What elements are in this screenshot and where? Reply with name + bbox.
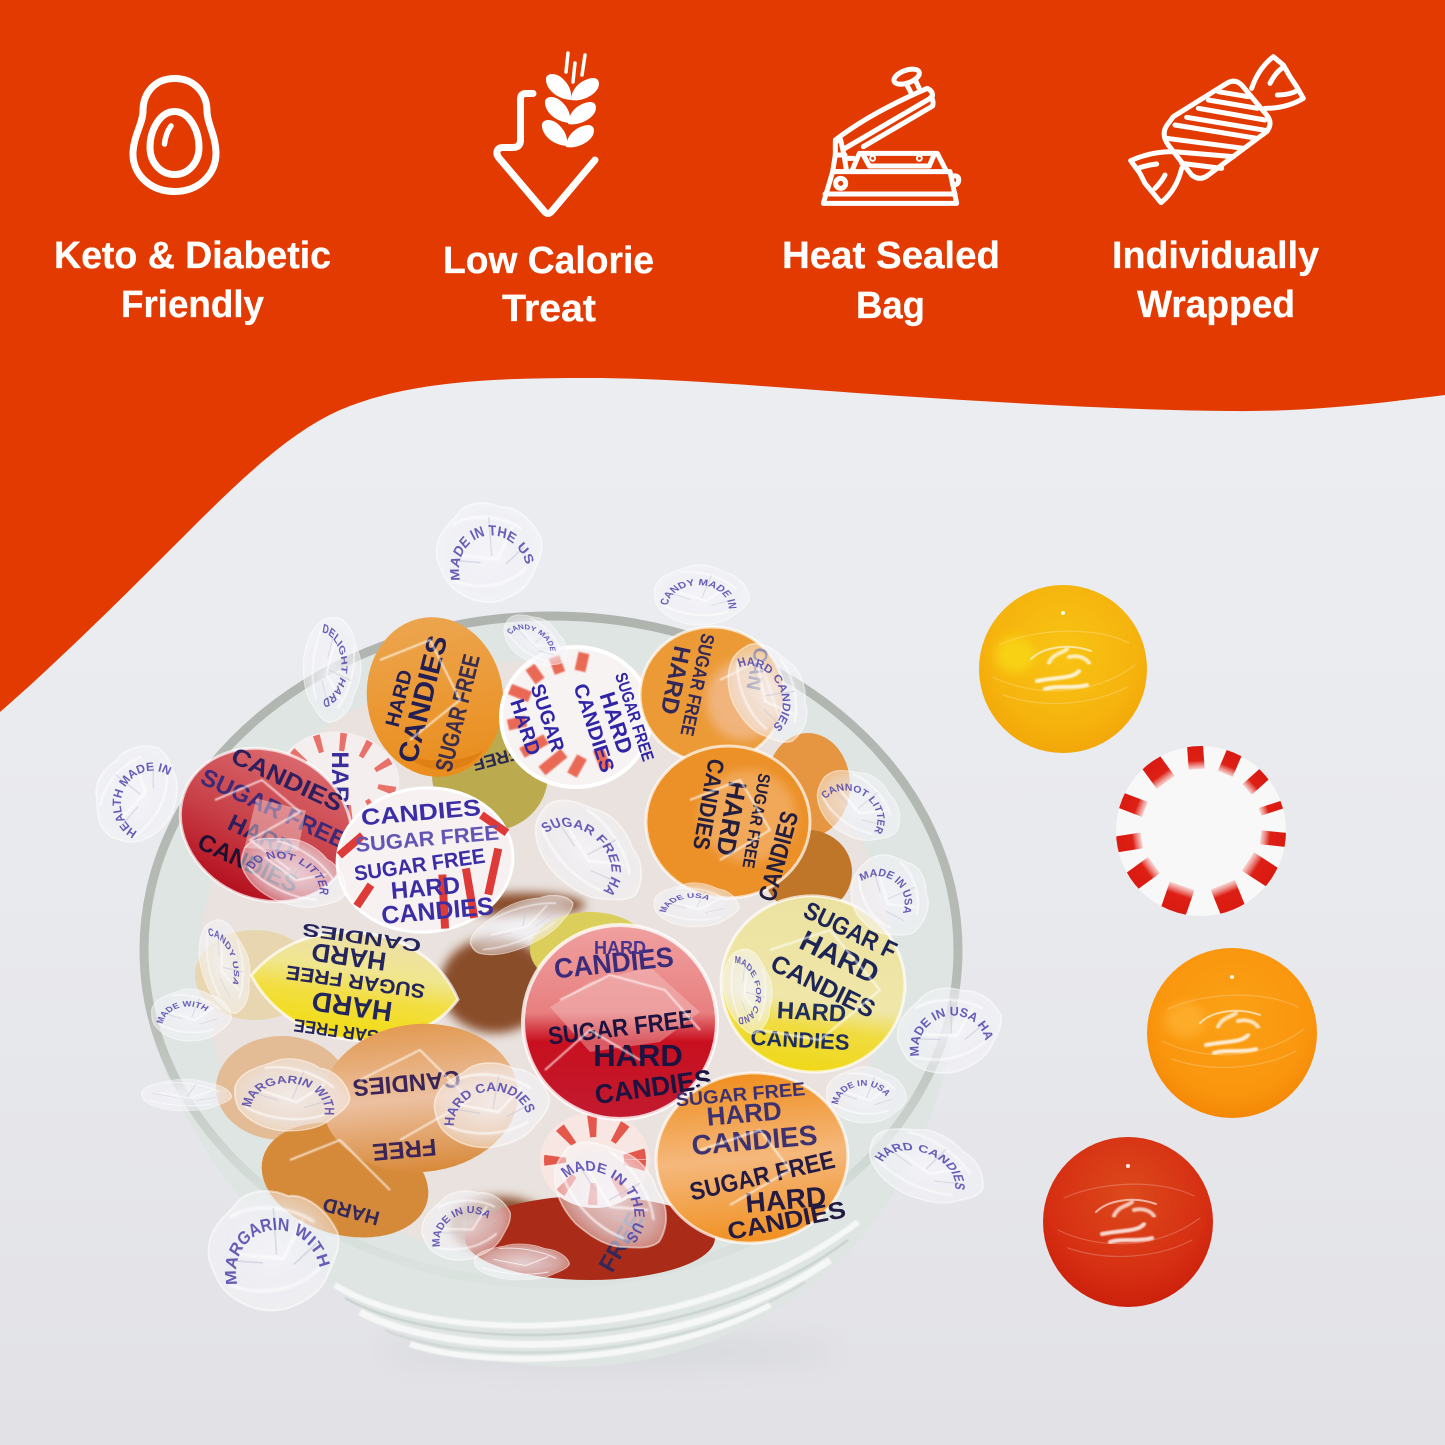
wrapper: bottom centre twist: MADE IN THE USA: [560, 1160, 645, 1242]
candy: orange top left: [357, 608, 513, 786]
candy: orange top right: CAN: [741, 645, 772, 692]
candy: peppermint top centre: SUGAR FREE: [611, 670, 658, 764]
candy: red large centre: HARD: [594, 938, 646, 958]
candy: orange bottom right: CANDIES: [725, 1196, 848, 1246]
wrapper: left edge strip: [142, 1079, 232, 1111]
candy: peppermint bottom centre: [540, 1112, 650, 1208]
candy: orange centre right: CANDIES: [753, 808, 804, 904]
candy: brown orange bottom left: HARD: [321, 1193, 382, 1229]
wrapper: orange right twist: [727, 643, 808, 743]
candy: peppermint left centre: SUGAR FREE: [353, 845, 487, 886]
candy: orange centre right: SUGAR FREE: [738, 772, 774, 870]
feature: individually wrapped: [1112, 57, 1319, 326]
wrapper: centre twist: [463, 881, 581, 967]
candy: orange bottom right: SUGAR FREE: [675, 1079, 806, 1111]
candy: yellow right: SUGAR F: [799, 896, 901, 965]
candy: brown orange centre bottom: CANDIES: [352, 1064, 462, 1101]
wrapper: right of centre candy: CANNOT LITTER: [822, 784, 885, 834]
wrapper: orange right twist: HARD CANDIES MADE USA: [737, 657, 790, 731]
candy: amber: [979, 585, 1147, 753]
wrapper: bottom strip: [474, 1244, 569, 1280]
wrapper: far left lower: MADE WITH: [156, 1000, 209, 1024]
candy: orange: [1147, 948, 1317, 1118]
candy: red: [1043, 1137, 1213, 1307]
film crinkles across candies: [215, 640, 880, 1205]
orange header band with wave: [0, 0, 1445, 712]
candy: orange centre right: HARD: [710, 779, 753, 858]
label: low calorie treat: Treat: [502, 288, 596, 330]
candy: peppermint: [1115, 745, 1287, 917]
wrapper: lower left twist: MARGARIN WITH WHEAT: [242, 1076, 334, 1114]
wrapper: top centre twist: [436, 502, 542, 603]
wrapper: bottom left centre: MADE IN USA: [432, 1206, 490, 1247]
wrapper: far left lower: [151, 988, 232, 1042]
wrapper: lower left twist: [234, 1058, 351, 1132]
wrapper: right of centre candy: [816, 770, 900, 841]
candy: peppermint top centre: HARD: [505, 696, 544, 758]
candy: peppermint top centre: HARD: [595, 689, 638, 757]
candy: olive: FREE: [470, 743, 522, 775]
candy: red left: HARD: [224, 809, 298, 863]
candy: yellow left: [244, 913, 466, 1057]
icon: down arrow with wheat: [497, 53, 599, 214]
candy: pale yellow behind left: [195, 930, 315, 1020]
candy: orange top left: SUGAR FREE: [431, 652, 486, 775]
candy: peppermint top centre: CANDIES: [569, 681, 618, 775]
candy: red large centre: [523, 925, 717, 1119]
label: keto and diabetic friendly: Friendly: [121, 284, 264, 326]
wrapper: bottom left twist: MARGARIN WITH: [224, 1218, 330, 1284]
candy: brown behind lower right: [764, 830, 852, 914]
candy: red left: CANDIES: [227, 743, 347, 818]
wrapper: yellow inner twirl: MADE FOR CANDY: [735, 956, 762, 1024]
candy: brown orange bottom left: [249, 1105, 441, 1255]
wrapper: far right upper: MADE IN USA: [859, 868, 912, 914]
wrapper: top left twist: [303, 617, 362, 724]
candy: orange behind right: [766, 733, 850, 837]
candy: brown orange centre bottom: FREE: [371, 1133, 437, 1165]
wrapper: far right upper: [850, 854, 929, 936]
back candies: [195, 719, 852, 1280]
candy: yellow right: [710, 884, 916, 1084]
wrapper: below yellow candy: MADE IN USA: [831, 1080, 890, 1104]
dark gaps between candies: [440, 893, 585, 1253]
glass bowl body: [141, 612, 961, 1367]
icon: heat sealer: [823, 66, 959, 203]
candy: yellow right: CANDIES: [766, 949, 880, 1024]
candy: orange top right: HARD: [655, 643, 695, 717]
candy: orange bottom right: HARD: [744, 1181, 827, 1219]
wrapper: connector top centre: [504, 614, 566, 666]
wrapper: red candy right twist: DO NOT LITTER HARD: [246, 851, 328, 895]
candy: peppermint left centre: SUGAR FREE: [354, 821, 500, 857]
label: heat sealed bag: [782, 235, 1000, 327]
candy: orange bottom right: CANDIES: [690, 1119, 819, 1161]
candy: peppermint back left: [273, 722, 407, 834]
candy: olive: [432, 719, 548, 831]
candy: brown orange centre bottom: [316, 1016, 524, 1180]
bowl glass ridges: [335, 1222, 858, 1359]
candy: red large centre: CANDIES: [552, 941, 675, 985]
feature: heat sealed bag: [782, 66, 1000, 327]
candy: peppermint left centre: HARD: [390, 872, 461, 905]
wrapper: centre lower twist: HARD CANDIES MADE USA: [444, 1082, 534, 1126]
candy: red bottom: FREE: [594, 1208, 649, 1277]
label: keto and diabetic friendly: Keto & Diabetic: [54, 235, 331, 277]
icon: avocado: [133, 78, 216, 192]
candy: peppermint top centre: SUGAR: [526, 681, 568, 755]
candy: yellow right: CANDIES: [750, 1025, 850, 1055]
candy: peppermint left centre: CANDIES: [380, 892, 495, 930]
candy: yellow left: SUGAR FREE: [292, 1015, 404, 1050]
glass bowl filled with wrapped candies: [96, 502, 1051, 1362]
wrapper: yellow left twist: [198, 919, 250, 1014]
label: low calorie treat: [443, 240, 654, 330]
candy: orange bottom right: [649, 1065, 855, 1252]
wrapper: top right twist: [654, 564, 750, 626]
wrapper: middle right twist: [534, 800, 642, 900]
candy: orange top right: [640, 626, 784, 763]
candy: yellow right: HARD: [776, 997, 847, 1028]
bowl rim: [144, 616, 958, 1284]
candy: orange top left: HARD: [382, 668, 417, 729]
candy: red left: CANDIES: [193, 828, 303, 899]
wrapper: top right twist: CANDY MADE IN USA: [660, 578, 737, 608]
candy: pale orange lower left: [216, 1036, 348, 1140]
candy: red large centre: HARD: [593, 1038, 683, 1073]
wrapper: middle right twist: SUGAR FREE HARD: [542, 818, 622, 895]
candy: peppermint back left: HARD: [326, 751, 353, 821]
candy: red left: [155, 721, 377, 929]
candy: red bottom: [465, 1196, 715, 1280]
label: low calorie treat: Low Calorie: [443, 240, 654, 282]
wrapper: left of red candy: [96, 746, 178, 842]
label: keto and diabetic friendly: [54, 235, 331, 326]
candy: yellow left: SUGAR FREE: [285, 960, 426, 1002]
candy: orange bottom right: SUGAR FREE: [687, 1146, 838, 1206]
candy: yellow left: HARD: [310, 985, 394, 1027]
candy wrappers: [96, 502, 1051, 1312]
wrapper: lower right twist: HARD CANDIES USA: [874, 1142, 965, 1190]
wrapper: left of red candy: HEALTH MADE IN USA: [112, 762, 172, 838]
feature: keto and diabetic friendly: [54, 78, 331, 326]
wrapper: right middle twist: [654, 882, 740, 928]
loose candies: [979, 585, 1317, 1307]
label: individually wrapped: Individually: [1112, 235, 1319, 277]
wrapper: bottom left twist: [208, 1190, 340, 1312]
candy: red large centre: SUGAR FREE: [547, 1005, 695, 1051]
label: individually wrapped: Wrapped: [1137, 284, 1295, 326]
bowl shadow: [380, 1336, 840, 1368]
wrapper: connector top centre: CANDY MADE: [507, 624, 556, 651]
candy: yellow right: HARD: [794, 925, 884, 991]
wrapper: bottom centre twist: [554, 1142, 667, 1248]
candy: yellow left: HARD: [310, 937, 388, 977]
wrapper: lower right twist: [869, 1128, 984, 1204]
wrapper: yellow inner twirl: [722, 948, 773, 1035]
candy: peppermint top centre: [501, 647, 658, 797]
candy: peppermint left centre: [331, 781, 519, 939]
candy mass base colour: [200, 660, 890, 1260]
wrapper: yellow left twist: CANDY USA: [208, 928, 240, 984]
candy: peppermint left centre: CANDIES: [360, 794, 482, 830]
candy: red large centre: CANDIES: [593, 1064, 714, 1110]
candy: orange top left: CANDIES: [392, 632, 453, 766]
label: individually wrapped: [1112, 235, 1319, 326]
label: heat sealed bag: Bag: [856, 285, 925, 327]
wrapper: below yellow candy: [826, 1066, 907, 1124]
wrapper: right middle twist: MADE USA: [659, 893, 708, 912]
candy: orange bottom right: HARD: [705, 1095, 783, 1132]
wrapper: right of yellow candy: MADE IN USA HARD: [910, 1006, 993, 1056]
candy: yellow behind red: [530, 912, 650, 988]
wrapper: red candy right twist: [240, 838, 345, 908]
candy: red left: SUGAR FREE: [196, 764, 350, 855]
wrapper: bottom left centre: [421, 1190, 512, 1261]
candy: orange centre right: [646, 746, 810, 904]
candy: orange top right: SUGAR FREE: [675, 632, 718, 738]
feature: low calorie treat: [443, 53, 654, 330]
label: heat sealed bag: Heat Sealed: [782, 235, 1000, 277]
candy: orange centre right: CANDIES: [688, 757, 730, 852]
wrapper: top centre twist: MADE IN THE USA HARD: [450, 525, 534, 580]
wrapper: top left twist: DELIGHT HARD CANDY: [322, 624, 348, 707]
wrapper: right of yellow candy: [896, 988, 1002, 1074]
wrapper: centre lower twist: [433, 1062, 550, 1148]
candy: yellow left: CANDIES: [301, 919, 422, 956]
icon: wrapped candy: [1131, 57, 1303, 203]
